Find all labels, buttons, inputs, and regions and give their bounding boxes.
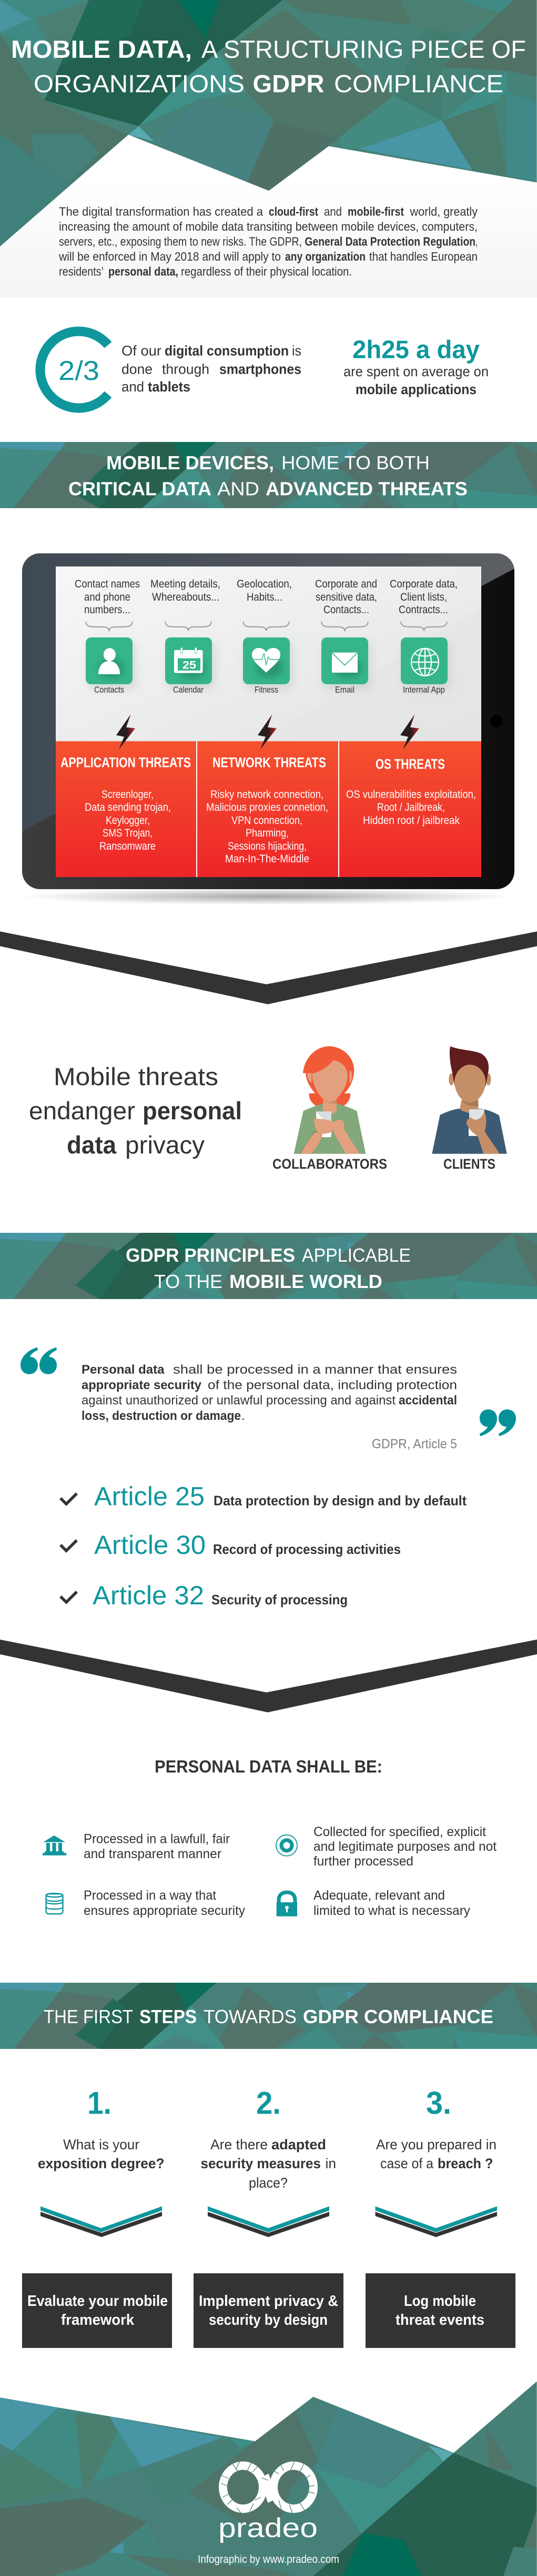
list row: article 25 [60,1482,467,1511]
threat column: application: Keylogger, [106,814,150,827]
hero polygon background [0,0,537,249]
banner: mobile devices: AND [217,478,259,499]
arrow: chevron divider 1 [0,931,537,1004]
logo: wordmark: pradeo [218,2513,318,2543]
intro text: that handles European [369,250,478,263]
banner: mobile devices: ADVANCED THREATS [266,478,468,499]
text: quote source: GDPR, Article 5 [372,1437,457,1451]
panel: footer [0,2379,537,2576]
icon: fitness [243,637,292,689]
banner: first steps: TOWARDS [204,2006,297,2027]
logo: infinity mark [220,2461,315,2513]
text: quote: Personal data [82,1363,165,1377]
threat column: OS: OS vulnerabilities exploitation, [346,788,476,801]
data descriptions: Client lists, [400,591,447,603]
text: collected: and legitimate purposes and not [313,1839,497,1854]
data descriptions: Contacts... [323,603,369,616]
icon: email [321,637,371,689]
icon: lightning bolts [116,714,419,749]
text: mobile threats statement: Mobile threats [54,1063,218,1090]
text: collected: further processed [313,1854,413,1869]
text: collected: Collected for specified, explicit [313,1825,486,1839]
stat text: digital consumption: smartphones [219,362,301,377]
threat column: network: NETWORK THREATS [212,755,326,770]
intro text: and [324,205,342,219]
box: evaluate: Evaluate your mobile [27,2293,168,2310]
step column 2: place? [249,2175,288,2191]
footer polygon background [0,2379,537,2576]
data descriptions: sensitive data, [316,591,377,603]
threat column: network: VPN connection, [231,814,302,827]
stat: two thirds ring: 2/3 [58,356,99,386]
intro text [58,205,478,279]
icon: internal app [401,637,450,689]
tablet body [22,553,514,889]
step column 2 [201,2085,336,2237]
list row: article 30 [60,1530,401,1560]
threat column: application: Data sending trojan, [85,801,171,813]
intro text: any organization [285,250,366,263]
intro background [0,179,537,297]
list row: article 30: Record of processing activities [213,1541,401,1557]
step column 1: 1. [87,2085,112,2121]
intro text: residents’ [59,265,104,279]
label: clients: CLIENTS [443,1156,495,1172]
list row: article 30: Article 30 [94,1530,206,1560]
data descriptions: and phone [84,591,130,603]
tablet screen [56,566,481,741]
box: implement: security by design [209,2312,328,2328]
box: log: threat events [396,2312,484,2328]
figure: client man [432,1046,507,1154]
step column 2: Are there [210,2137,268,2152]
data descriptions: Habits... [247,591,282,603]
banner: first steps: GDPR COMPLIANCE [303,2006,493,2027]
text: quote: of the personal data, including protection [208,1378,457,1393]
threat column: application: Screenloger, [102,788,154,801]
list row: article 25: Data protection by design and by default [214,1492,467,1508]
step column 2: 2. [256,2085,281,2121]
list row: article 25: Article 25 [94,1482,205,1511]
curly braces [86,622,447,631]
banner: mobile devices: MOBILE DEVICES, [106,452,274,473]
threat column: network: Pharming, [246,827,289,839]
text: quote: appropriate security [82,1378,202,1393]
text: security: ensures appropriate security [84,1903,245,1918]
title: MOBILE DATA, [11,35,192,63]
text: lawful: Processed in a lawfull, fair [84,1832,230,1847]
app labels: Email [335,685,354,695]
title [11,35,526,98]
list row: article 32 [60,1581,348,1610]
data descriptions: Meeting details, [150,578,220,590]
text: mobile threats statement: endanger [29,1097,135,1125]
stat text: digital consumption: is [292,343,301,359]
list row: article 32: Security of processing [211,1592,348,1608]
step column 1: What is your [63,2137,139,2152]
text: quote: loss, destruction or damage [82,1409,241,1423]
box: log [366,2273,515,2348]
text: lawful: and transparent manner [84,1847,221,1861]
text: adequate [313,1888,470,1918]
stat: 2h25 a day: 2h25 a day [352,336,480,364]
text: quote: . [241,1409,245,1423]
banner: mobile devices: CRITICAL DATA [68,478,211,499]
intro text: world, greatly [410,205,478,219]
threat column: OS [346,756,476,827]
data descriptions: numbers... [84,603,130,616]
banner: mobile devices [0,442,537,508]
threat column: network: Malicious proxies connetion, [206,801,328,813]
box: evaluate [22,2273,172,2348]
icon: padlock [277,1892,297,1916]
step column 2: security measures [201,2156,321,2171]
text: mobile threats statement: privacy [125,1131,205,1159]
data descriptions: Corporate and [315,578,377,590]
panel: digital consumption stats [40,331,489,408]
data descriptions: Corporate data, [390,578,458,590]
step column 3: Are you prepared in [376,2137,497,2152]
stat text: digital consumption: tablets [148,379,190,395]
threat column: application [60,755,191,852]
panel: hero header [0,0,537,297]
banner: first steps: STEPS [139,2006,197,2027]
text: lawful [84,1832,230,1861]
title: COMPLIANCE [334,69,503,98]
stat: 2h25 a day: are spent on average on [343,364,489,379]
banner: GDPR principles [0,1233,537,1299]
intro text: The digital transformation has created a [59,205,263,219]
credit line: Infographic by www.pradeo.com [198,2553,339,2565]
icon: database [46,1893,63,1914]
text: adequate: Adequate, relevant and [313,1888,445,1903]
stat text: digital consumption: digital consumption [165,343,289,359]
text: mobile threats statement [29,1063,242,1159]
text: security [84,1888,245,1918]
threat column: network: Risky network connection, [210,788,323,801]
text: quote: against unauthorized or unlawful processing and against [82,1394,396,1408]
app labels: Fitness [255,685,278,695]
text: quote: accidental [399,1394,457,1408]
icon: contacts [86,637,135,689]
intro text: cloud-first [269,205,318,219]
panel: threats red area [56,741,481,877]
app labels: Contacts [94,685,124,695]
data descriptions: Contracts... [399,603,448,616]
step column 3: 3. [426,2085,451,2121]
threat column: OS: Root / Jailbreak, [377,801,445,813]
step column 2: in [325,2156,336,2171]
intro text: General Data Protection Regulation [305,234,475,248]
app labels: Internal App [403,685,445,695]
stat text: digital consumption: through [162,362,209,377]
title: GDPR [252,69,324,98]
threat column: application: SMS Trojan, [103,827,153,839]
banner: GDPR principles: APPLICABLE [302,1244,411,1266]
intro text: mobile-first [348,205,404,219]
text: adequate: limited to what is necessary [313,1903,470,1918]
stat: 2h25 a day: mobile applications [356,382,477,397]
step column 3: breach ? [438,2156,493,2171]
icon: opening quote [21,1347,57,1374]
banner: first steps: THE FIRST [44,2006,133,2027]
arrow: chevron divider 2 [0,1640,537,1712]
stat text: digital consumption [121,343,301,395]
list row: article 32: Article 32 [93,1581,204,1610]
intro text: personal data, [108,265,178,279]
icon: calendar: 25 [183,659,196,672]
banner: GDPR principles: MOBILE WORLD [229,1271,382,1292]
step column 1 [38,2085,164,2237]
stat: two thirds ring [40,331,108,408]
threat column: application: APPLICATION THREATS [60,755,191,770]
box: evaluate: framework [61,2312,135,2328]
intro text: increasing the amount of mobile data transiting between mobile devices, computers, [59,220,478,233]
icon: calendar [165,637,215,689]
threat column: OS: OS THREATS [376,756,445,772]
banner: GDPR principles: GDPR PRINCIPLES [126,1244,295,1266]
heading: personal data shall be: PERSONAL DATA SHALL BE: [155,1757,382,1776]
intro text: servers, etc., exposing them to new risks. The GDPR, [59,234,302,248]
icon: bank [43,1836,66,1856]
data descriptions [75,578,458,616]
stat text: digital consumption: and [121,379,144,395]
data descriptions: Geolocation, [237,578,292,590]
panel: tablet with data and threats [20,553,514,905]
text: quote: shall be processed in a manner that ensures [173,1363,457,1377]
threat column: network: Man-In-The-Middle [225,852,309,865]
data descriptions: Whereabouts... [152,591,219,603]
banner: first steps [0,1983,537,2049]
step column 1: exposition degree? [38,2156,164,2171]
threat column: OS: Hidden root / jailbreak [363,814,460,827]
icon: closing quote [480,1409,516,1436]
figure: collaborator woman [294,1046,366,1154]
icon: target [276,1835,297,1856]
intro text: will be enforced in May 2018 and will apply to [58,250,281,263]
box: log: Log mobile [404,2293,476,2310]
tablet shadow [20,888,514,905]
box: implement: Implement privacy & [199,2293,338,2310]
banner: GDPR principles: TO THE [154,1271,222,1292]
text: collected [313,1825,497,1869]
text: mobile threats statement: personal [143,1097,242,1125]
stat: 2h25 a day [343,336,489,397]
text: mobile threats statement: data [67,1131,117,1159]
stat text: digital consumption: Of our [121,343,161,359]
intro text: regardless of their physical location. [181,265,352,279]
label: collaborators: COLLABORATORS [272,1156,387,1172]
app labels: Calendar [173,685,204,695]
tablet home button [490,715,503,727]
step column 3: case of a [380,2156,434,2171]
app labels [94,685,445,695]
intro text: , [475,234,478,248]
threat column: network: Sessions hijacking, [228,840,307,852]
step column 3 [376,2085,497,2237]
text: quote [82,1363,457,1423]
step column 2: adapted [271,2137,326,2152]
banner: mobile devices: HOME TO BOTH [281,452,430,473]
stat text: digital consumption: done [121,362,153,377]
title: A STRUCTURING PIECE OF [201,35,526,63]
title: ORGANIZATIONS [34,69,245,98]
box: implement [194,2273,343,2348]
text: security: Processed in a way that [84,1888,216,1903]
threat column: network [206,755,328,865]
threat column: application: Ransomware [99,840,156,852]
data descriptions: Contact names [75,578,140,590]
